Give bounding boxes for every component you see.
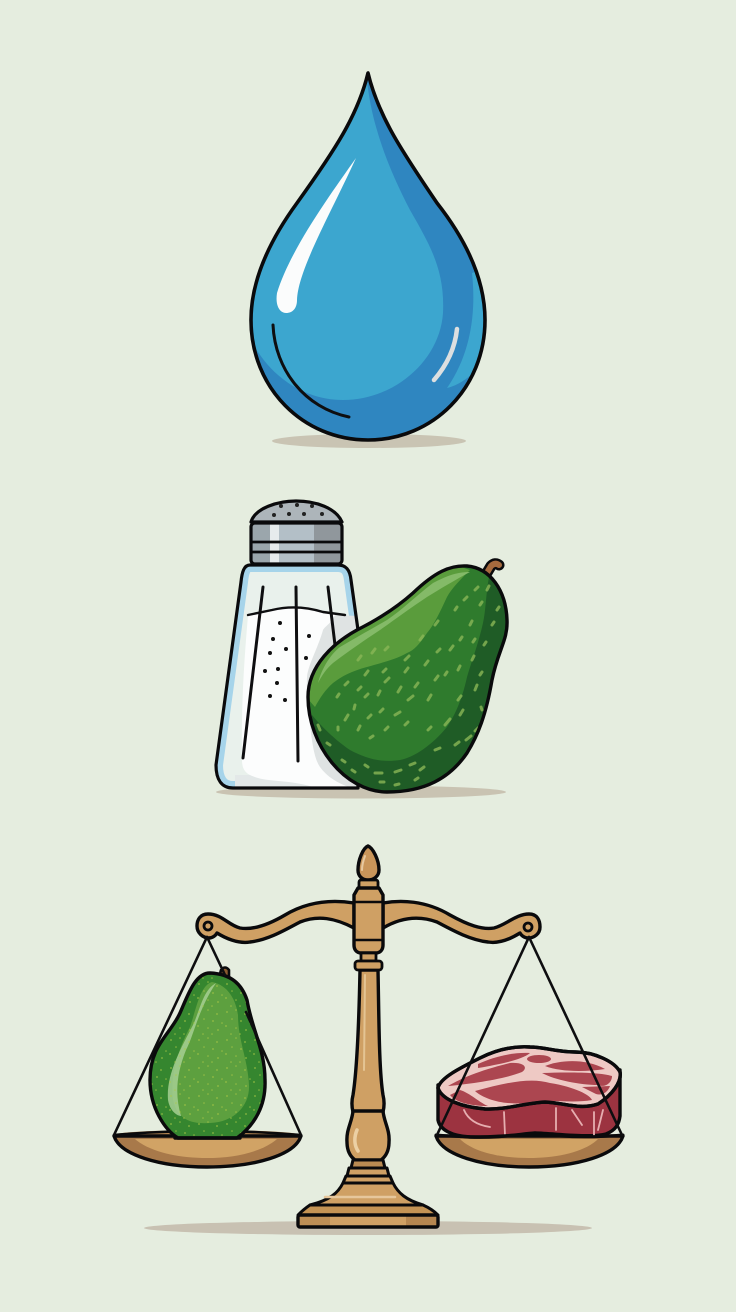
shadow: salt and avocado (216, 786, 506, 798)
right beam (383, 901, 540, 942)
right pan (436, 1136, 623, 1167)
balance scale (114, 846, 623, 1227)
left beam (197, 901, 354, 942)
inner curve (273, 325, 349, 417)
icon: water drop (240, 73, 492, 440)
shadow: scale (144, 1221, 592, 1235)
cap (251, 501, 342, 522)
icon: salt shaker (216, 501, 365, 791)
icon: avocado on pan (145, 965, 270, 1140)
hub block (354, 888, 383, 953)
salt (242, 608, 346, 786)
highlight streak (277, 158, 356, 313)
column (352, 970, 384, 1112)
icon: steak on pan (438, 1047, 620, 1137)
illustration canvas (112, 71, 625, 1235)
finial (358, 846, 379, 880)
jar vertical lines (243, 587, 335, 761)
right highlight (434, 329, 457, 380)
scale strings (114, 937, 622, 1135)
salt surface line (248, 607, 345, 615)
bulb (347, 1111, 389, 1160)
left pan (114, 1130, 300, 1140)
icon: avocado whole (300, 560, 520, 800)
stem (485, 564, 499, 576)
jar (216, 565, 358, 788)
stepped base (351, 1160, 385, 1168)
shadow: water drop (272, 434, 466, 448)
salt specks (263, 621, 311, 702)
avocado speckles (318, 586, 499, 785)
